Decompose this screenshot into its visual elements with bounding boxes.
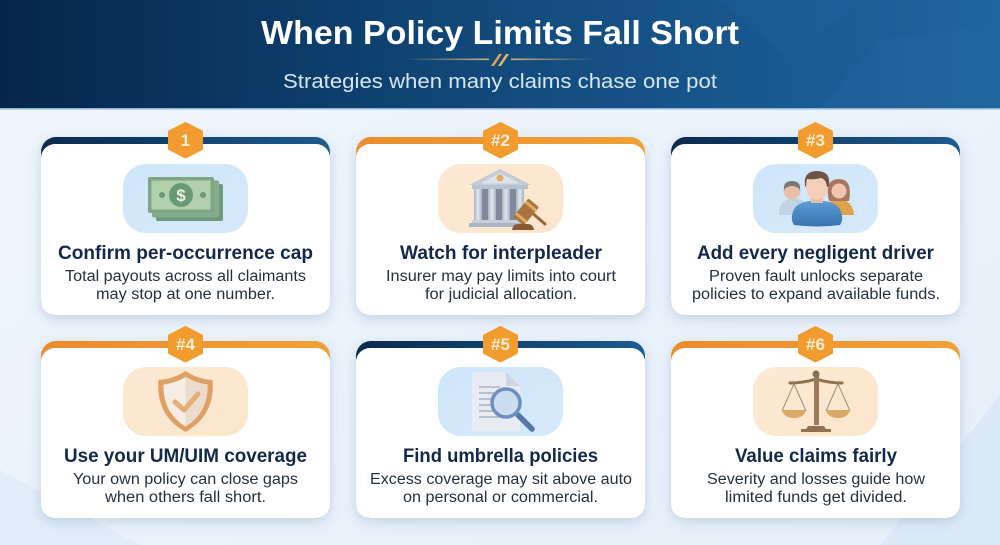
- icon: three people: [779, 171, 854, 226]
- badge 3: [799, 123, 832, 158]
- icon: document and magnifier: [472, 372, 532, 431]
- icon: balance scales: [782, 370, 850, 432]
- description: Excess coverage may sit above auto: [370, 471, 632, 488]
- title: When Policy Limits Fall Short: [261, 14, 739, 51]
- heading: Use your UM/UIM coverage: [64, 446, 307, 467]
- badge 4: #4: [176, 335, 195, 354]
- heading: Confirm per-occurrence cap: [58, 243, 313, 264]
- badge 5: #5: [491, 335, 510, 354]
- icon: cash stack: [148, 177, 223, 221]
- panel: card 6: [671, 327, 960, 518]
- badge 1: 1: [181, 131, 190, 150]
- description: on personal or commercial.: [403, 489, 598, 506]
- icon panel: [753, 367, 878, 436]
- description: [707, 471, 926, 506]
- badge 3: #3: [806, 131, 825, 150]
- header banner: [0, 0, 1000, 110]
- icon panel: [123, 367, 248, 436]
- description: may stop at one number.: [96, 286, 275, 303]
- badge 1: [169, 123, 202, 158]
- badge 2: #2: [491, 131, 510, 150]
- description: policies to expand available funds.: [692, 286, 940, 303]
- icon: cash stack: $: [176, 186, 186, 205]
- panel: card 5: [356, 327, 645, 518]
- description: Proven fault unlocks separate: [709, 268, 923, 285]
- badge 6: #6: [806, 335, 825, 354]
- badge 5: [484, 327, 517, 362]
- panel: card 3: [671, 123, 960, 315]
- heading: Value claims fairly: [735, 446, 897, 467]
- description: [73, 471, 298, 506]
- icon panel: [438, 164, 563, 233]
- badge 4: [169, 327, 202, 362]
- description: Your own policy can close gaps: [73, 471, 298, 488]
- description: [370, 471, 632, 506]
- description: when others fall short.: [104, 489, 266, 506]
- description: Severity and losses guide how: [707, 471, 926, 488]
- subtitle: Strategies when many claims chase one pot: [283, 71, 717, 93]
- description: [386, 268, 617, 303]
- description: [65, 268, 306, 303]
- icon panel: [123, 164, 248, 233]
- icon: courthouse and gavel: [469, 169, 545, 230]
- panel: card 4: [41, 327, 330, 518]
- icon panel: [753, 164, 878, 233]
- panel: card 1: [41, 123, 330, 315]
- panel: card 2: [356, 123, 645, 315]
- icon panel: [438, 367, 563, 436]
- heading: Watch for interpleader: [400, 243, 603, 264]
- description: Insurer may pay limits into court: [386, 268, 617, 285]
- icon: shield with check: [158, 371, 213, 432]
- description: for judicial allocation.: [425, 286, 577, 303]
- badge 2: [484, 123, 517, 158]
- heading: Add every negligent driver: [697, 243, 935, 264]
- title divider: [405, 54, 595, 66]
- heading: Find umbrella policies: [403, 446, 598, 467]
- description: limited funds get divided.: [725, 489, 907, 506]
- badge 6: [799, 327, 832, 362]
- description: Total payouts across all claimants: [65, 268, 306, 285]
- description: [692, 268, 940, 303]
